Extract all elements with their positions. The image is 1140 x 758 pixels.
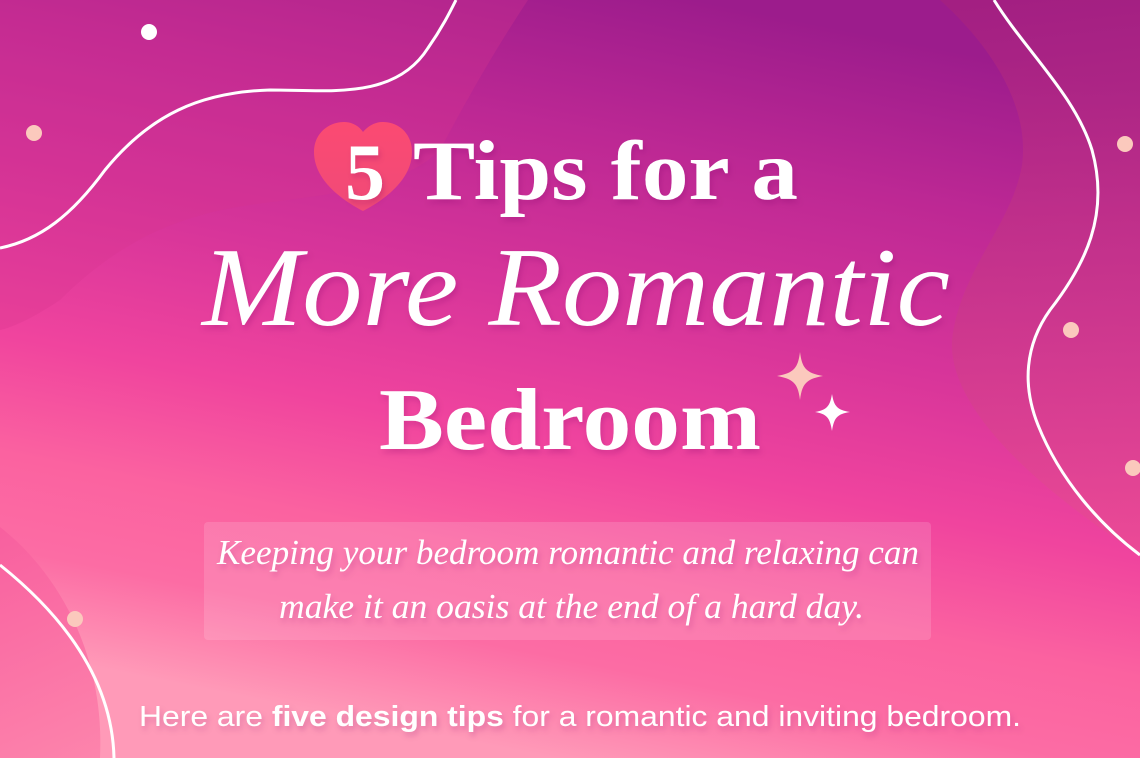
- shape: right wave: [940, 0, 1140, 555]
- title line 1: Tips for a: [413, 124, 798, 218]
- line: bottom-left curve: [0, 565, 114, 758]
- title line 3: Bedroom: [379, 372, 761, 469]
- footer sentence: Here are five design tips for a romantic and inviting bedroom.: [139, 701, 1021, 733]
- shape: top-left wave: [0, 0, 528, 330]
- icon: heart: [314, 122, 412, 211]
- icon: large sparkle: [777, 352, 823, 400]
- dots: [26, 24, 1140, 627]
- line: right curve: [994, 0, 1140, 555]
- icon: small sparkle: [815, 394, 850, 431]
- line: top-left curve: [0, 0, 456, 248]
- shape: bottom-left wave: [0, 527, 100, 758]
- intro panel: [204, 522, 931, 640]
- title line 1: 5: [345, 129, 385, 217]
- intro text: [216, 533, 919, 626]
- intro text: make it an oasis at the end of a hard day.: [279, 587, 864, 626]
- intro text: Keeping your bedroom romantic and relaxing can: [216, 533, 919, 572]
- title line 2: script: More Romantic: [200, 226, 950, 350]
